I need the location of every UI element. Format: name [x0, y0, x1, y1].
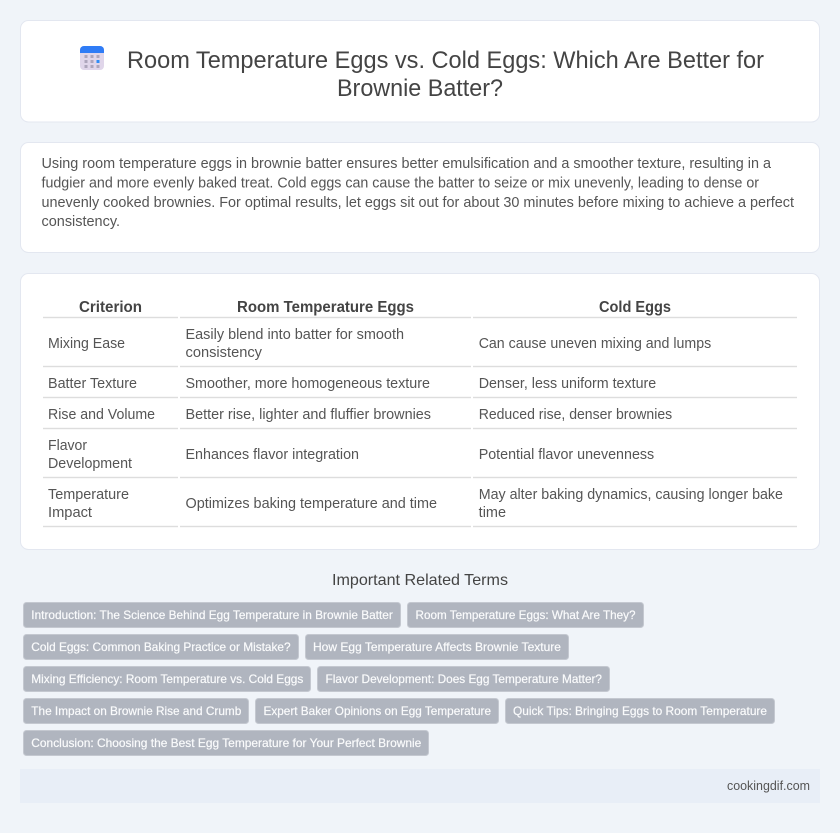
panel: introduction: [20, 142, 820, 252]
tag: expert opinions: [256, 698, 498, 724]
table row: batter texture: [43, 376, 797, 398]
panel: related term tags: [24, 602, 774, 756]
tag: expert opinions: Expert Baker Opinions on Egg Temperature: [264, 704, 491, 718]
tag: room temperature eggs: Room Temperature Eggs: What Are They?: [416, 608, 636, 622]
table row: temperature impact: May alter baking dynamics, causing longer bake: [479, 487, 783, 503]
table row: flavor development: Development: [48, 456, 132, 472]
table row: rise and volume: [43, 407, 797, 429]
text block: introduction paragraph: fudgier and more evenly baked treat. Cold eggs can cause the batter to seize or mix unevenly, leading to dense or: [42, 176, 759, 192]
panel: comparison table: [20, 274, 820, 550]
table row: batter texture: Batter Texture: [48, 376, 137, 392]
text block: introduction paragraph: [42, 156, 794, 230]
tag: quick tips: Quick Tips: Bringing Eggs to Room Temperature: [513, 704, 767, 718]
text block: introduction paragraph: consistency.: [42, 214, 120, 230]
tag: introduction: Introduction: The Science Behind Egg Temperature in Brownie Batter: [31, 608, 393, 622]
panel: header: [20, 20, 820, 122]
table row: mixing ease: Easily blend into batter for smooth: [186, 327, 404, 343]
icon: calendar: [80, 46, 104, 70]
tag: brownie texture: How Egg Temperature Affects Brownie Texture: [313, 640, 561, 654]
table row: temperature impact: time: [479, 505, 506, 521]
table row: batter texture: Denser, less uniform texture: [479, 376, 656, 392]
table row: temperature impact: Temperature: [48, 487, 129, 503]
tag: flavor development: Flavor Development: Does Egg Temperature Matter?: [326, 672, 602, 686]
tag: mixing efficiency: [24, 666, 310, 692]
table header row: Criterion: [79, 299, 142, 316]
title: Room Temperature Eggs vs. Cold Eggs: Which Are Better for: [127, 47, 764, 74]
tag: cold eggs: Cold Eggs: Common Baking Practice or Mistake?: [31, 640, 291, 654]
table row: mixing ease: consistency: [186, 345, 263, 361]
table header row: [43, 299, 797, 318]
table row: temperature impact: [43, 487, 797, 527]
footer: cookingdif.com: [727, 778, 810, 793]
table row: batter texture: Smoother, more homogeneous texture: [186, 376, 430, 392]
title: [127, 47, 764, 102]
table row: mixing ease: [43, 327, 797, 367]
tag: conclusion: Conclusion: Choosing the Best Egg Temperature for Your Perfect Brownie: [31, 736, 422, 750]
tag: rise and crumb: [24, 698, 248, 724]
table row: flavor development: Flavor: [48, 438, 87, 454]
table row: rise and volume: Better rise, lighter and fluffier brownies: [186, 407, 431, 423]
table header row: Cold Eggs: [599, 299, 671, 316]
text block: introduction paragraph: Using room temperature eggs in brownie batter ensures better emulsification and a smoother texture, resulting in a: [42, 156, 771, 172]
text block: introduction paragraph: unevenly cooked brownies. For optimal results, let eggs sit out for about 30 minutes before mixing to achieve a perfect: [42, 195, 794, 211]
tag: conclusion: [24, 730, 428, 756]
tag: cold eggs: [24, 634, 298, 660]
tag: rise and crumb: The Impact on Brownie Rise and Crumb: [31, 704, 242, 718]
tag: quick tips: [506, 698, 774, 724]
table row: flavor development: [43, 438, 797, 478]
table header row: Room Temperature Eggs: [237, 299, 414, 316]
tag: room temperature eggs: [408, 602, 644, 628]
table row: rise and volume: Reduced rise, denser brownies: [479, 407, 672, 423]
title: Brownie Batter?: [337, 75, 503, 102]
tag: mixing efficiency: Mixing Efficiency: Room Temperature vs. Cold Eggs: [31, 672, 303, 686]
table row: flavor development: Potential flavor unevenness: [479, 447, 654, 463]
table row: temperature impact: Optimizes baking temperature and time: [186, 496, 437, 512]
table row: flavor development: Enhances flavor integration: [186, 447, 359, 463]
tag: flavor development: [318, 666, 610, 692]
heading: important related terms: Important Related Terms: [332, 572, 508, 589]
footer: [20, 769, 820, 803]
table row: mixing ease: Mixing Ease: [48, 336, 125, 352]
tag: brownie texture: [306, 634, 568, 660]
table row: mixing ease: Can cause uneven mixing and lumps: [479, 336, 711, 352]
table row: rise and volume: Rise and Volume: [48, 407, 155, 423]
tag: introduction: [24, 602, 400, 628]
table row: temperature impact: Impact: [48, 505, 92, 521]
